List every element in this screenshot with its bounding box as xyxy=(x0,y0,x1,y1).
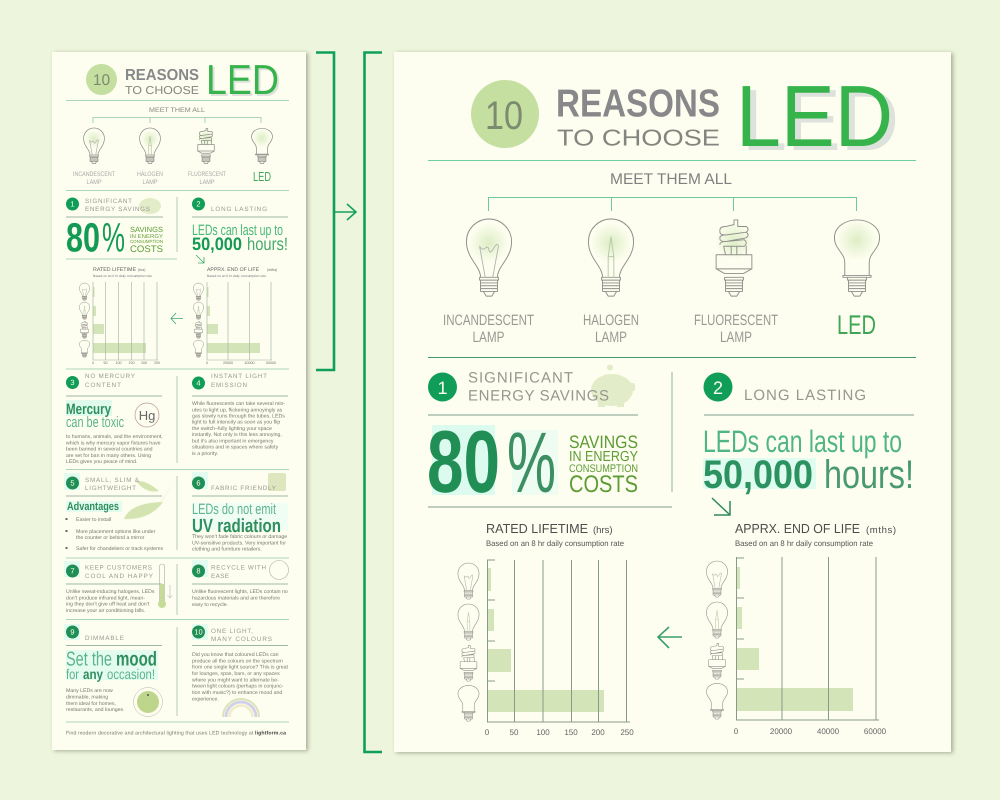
stat caption: COSTS xyxy=(569,471,638,498)
section 5 small: SMALL, SLIM & xyxy=(85,477,140,484)
arrow: left xyxy=(658,627,682,648)
axes and grid xyxy=(736,557,879,720)
chart small: rated lifetime: Based on an 8 hr daily consumption rate xyxy=(93,274,152,278)
arrow: down right xyxy=(712,498,730,515)
title: small poster: 10 xyxy=(93,72,110,89)
section 9 small: them ideal for homes, xyxy=(66,701,116,707)
section 3 small: NO MERCURY xyxy=(85,373,136,380)
section 7 small: increase your air conditioning bills. xyxy=(66,608,145,614)
claim: 50,000 xyxy=(703,453,813,497)
section 1 small xyxy=(66,198,163,260)
section 3 small xyxy=(66,373,163,465)
x axis labels: 200 xyxy=(591,728,605,737)
section 7 small: Unlike sweat-inducing halogens, LEDs xyxy=(66,589,155,595)
section 3 small: Mercury xyxy=(66,401,112,418)
section 3 small: which is why mercury vapor fixtures have xyxy=(66,440,161,446)
section 8 small: hazardous materials and are therefore xyxy=(192,596,280,602)
heading: LONG LASTING xyxy=(744,387,866,404)
x axis labels: 100 xyxy=(536,728,550,737)
section 9 small: 9 xyxy=(70,628,75,637)
lamp row xyxy=(84,128,272,164)
section 5 small: the counter or behind a mirror xyxy=(76,535,145,541)
section 6 small xyxy=(192,472,288,552)
title xyxy=(471,68,899,169)
chart: end of life: (mths) xyxy=(866,525,896,536)
section 4 small: instantly. Not only is this less annoying, xyxy=(192,432,282,438)
section 7 small: ing they don’t give off heat and don’t xyxy=(66,602,150,608)
section 1 small: IN ENERGY xyxy=(130,234,163,240)
number 2: 2 xyxy=(713,378,723,398)
bulbs xyxy=(458,563,479,721)
section 2 small: 2 xyxy=(196,200,201,209)
title: small poster: LED xyxy=(206,56,279,103)
badge: 10: 10 xyxy=(485,94,523,138)
section 3 small: Hg xyxy=(139,408,155,423)
section 4 small: gas slowly runs through the tubes, LEDs xyxy=(192,414,285,420)
chart small: end of life: APPRX. END OF LIFE xyxy=(207,267,260,273)
title: small poster xyxy=(86,56,281,105)
x axis labels: 250 xyxy=(620,728,634,737)
section 5 small: Safer for chandeliers or track systems xyxy=(76,546,163,552)
x axis labels: 40000 xyxy=(817,727,840,736)
section 1 small: 80 xyxy=(66,214,100,260)
section 8 small: easy to recycle. xyxy=(192,602,228,608)
x axis labels: 150 xyxy=(564,728,578,737)
heading: SIGNIFICANT xyxy=(468,370,573,387)
section 9 small: DIMMABLE xyxy=(85,635,124,642)
arrow small xyxy=(171,313,183,324)
section 7 small: 7 xyxy=(70,567,75,576)
icon: LED xyxy=(834,220,880,296)
section 1: energy savings xyxy=(427,364,638,511)
claim xyxy=(703,424,914,497)
chart small: end of life: 0 xyxy=(206,361,208,365)
chart small: rated lifetime: 0 xyxy=(92,361,94,365)
bracket: connects small poster to enlarged view xyxy=(316,52,382,752)
section 9 small: for xyxy=(66,666,79,682)
chart small: end of life xyxy=(193,267,277,365)
number 2 xyxy=(704,372,732,402)
section 10 small: tion with music?) to enhance mood and xyxy=(192,690,282,696)
section 5 small: More placement options like under xyxy=(76,529,156,535)
bulbs xyxy=(706,561,728,719)
lamp labels: LAMP xyxy=(472,329,504,346)
section 3 small: are set for ban in many others. Using xyxy=(66,453,151,459)
chart small: end of life: 40000 xyxy=(244,361,254,365)
section 4 small: the switch–fully lighting your space xyxy=(192,426,272,432)
section 7 small xyxy=(64,561,172,614)
x axis labels xyxy=(734,727,887,736)
section 4 small: utes to light up, flickering annoyingly as xyxy=(192,408,283,414)
section 8 small: Unlike fluorescent lights, LEDs contain no xyxy=(192,589,288,595)
panel: enlarged poster top xyxy=(394,52,951,752)
section 6 small: UV radiation xyxy=(192,516,281,537)
lamp labels: INCANDESCENT xyxy=(73,171,115,178)
lamp labels: LAMP xyxy=(595,329,627,346)
section 2 small: LEDs can last up to xyxy=(192,222,283,239)
section 9 small: dimmable, making xyxy=(66,694,108,700)
section 10 small: 10 xyxy=(194,628,203,637)
stat: 80%: 80 xyxy=(427,412,500,511)
stat caption: CONSUMPTION xyxy=(569,463,638,475)
chart: rated lifetime xyxy=(458,521,634,737)
heading: meet them all: MEET THEM ALL xyxy=(149,107,205,114)
section 2: long lasting xyxy=(703,372,914,515)
arrow: points to enlarged view xyxy=(335,204,356,220)
section 8 small: RECYCLE WITH xyxy=(211,564,266,572)
section 9 small: Set the xyxy=(66,648,112,670)
lamp labels: LED xyxy=(253,169,271,184)
x axis labels: 0 xyxy=(734,727,739,736)
section 9 small: any xyxy=(83,666,103,682)
section 7 small: don’t produce infrared light, mean- xyxy=(66,596,145,602)
chart: end of life: APPRX. END OF LIFE xyxy=(735,521,860,536)
section 4 small: INSTANT LIGHT xyxy=(211,373,267,380)
section 5 small: Advantages xyxy=(67,501,119,513)
footer: Find modern decorative and architectural lighting that uses LED technology at lightform.ca xyxy=(66,730,286,736)
stat caption: SAVINGS xyxy=(569,432,638,452)
section 10 small: from one single light source? This is great xyxy=(192,665,288,671)
section 9 small: occasion! xyxy=(107,666,155,682)
section 4 small xyxy=(192,373,288,457)
title: LED xyxy=(736,68,893,165)
chart: rated lifetime: (hrs) xyxy=(593,525,613,536)
section 3 small: CONTENT xyxy=(85,382,121,389)
section 6 small: They won’t fade fabric colours or damage xyxy=(192,534,287,540)
section 8 small: EASE xyxy=(211,573,229,580)
lamp labels: LAMP xyxy=(86,179,102,186)
heading: meet them all: MEET THEM ALL xyxy=(610,171,732,188)
lamp labels: LAMP xyxy=(200,179,214,186)
section 1 small: % xyxy=(102,214,125,260)
lamp labels: LED xyxy=(837,310,876,340)
chart small: rated lifetime: 200 xyxy=(141,361,147,365)
lamp labels: LAMP xyxy=(720,329,752,346)
section 6 small: 6 xyxy=(196,479,201,488)
stat caption: IN ENERGY xyxy=(569,449,638,465)
chart small: rated lifetime: (hrs) xyxy=(138,268,145,272)
chart small: rated lifetime: 150 xyxy=(128,361,134,365)
badge: 10 xyxy=(471,80,539,148)
stat: 80%: % xyxy=(507,415,556,511)
artefact highlight xyxy=(432,425,558,495)
stat caption xyxy=(569,432,638,498)
panel: full poster thumbnail xyxy=(52,52,306,750)
section 4 small: light to full intensity as soon as you flip xyxy=(192,420,280,426)
lamp row xyxy=(466,219,880,296)
title: small poster: LED xyxy=(208,58,281,105)
lamp labels xyxy=(443,310,876,346)
icon: fluorescent xyxy=(716,220,752,296)
section 7 small: COOL AND HAPPY xyxy=(85,573,154,580)
section 10 small: experience. xyxy=(192,696,219,702)
chart small: end of life: Based on an 8 hr daily consumption rate xyxy=(207,274,266,278)
lamp labels: INCANDESCENT xyxy=(443,312,534,329)
section 5 small: 5 xyxy=(70,479,75,488)
section 10 small: Did you know that coloured LEDs can xyxy=(192,652,279,658)
section 4 small: 4 xyxy=(196,379,201,388)
section 2 small: hours! xyxy=(247,234,288,254)
section 10 small xyxy=(192,624,288,717)
section 1 small: SIGNIFICANT xyxy=(85,198,132,205)
artefact highlight xyxy=(703,458,816,489)
section 3 small: 3 xyxy=(70,378,75,387)
lamp labels: LAMP xyxy=(142,179,158,186)
chart: end of life xyxy=(706,521,896,736)
title: TO CHOOSE xyxy=(557,125,720,151)
section 1 small: CONSUMPTION xyxy=(130,239,163,244)
lamp labels: FLUORESCENT xyxy=(188,171,226,178)
section 8 small: 8 xyxy=(196,567,201,576)
icon: halogen xyxy=(588,219,634,296)
chart small: rated lifetime: 50 xyxy=(104,361,108,365)
chart small: rated lifetime: 250 xyxy=(154,361,160,365)
section 9 small: Many LEDs are now xyxy=(66,688,113,694)
chart small: end of life: (mths) xyxy=(267,268,277,272)
x axis labels: 20000 xyxy=(770,727,793,736)
section 10 small: where you might want to alternate be- xyxy=(192,677,279,683)
number 1 xyxy=(428,372,457,402)
bars xyxy=(736,567,853,711)
section 9 small: restaurants, and lounges. xyxy=(66,707,125,713)
section 9 small: mood xyxy=(116,648,157,670)
bars xyxy=(487,568,604,712)
section 4 small: but it’s also important in emergency xyxy=(192,438,274,444)
title: REASONS xyxy=(556,83,720,126)
section 6 small: clothing and furniture retailers. xyxy=(192,546,262,552)
lamp labels: FLUORESCENT xyxy=(694,312,778,329)
lamp labels: HALOGEN xyxy=(137,171,163,178)
section 4 small: situations and in spaces where safety xyxy=(192,444,279,450)
x axis labels: 50 xyxy=(510,728,519,737)
section 1 small: COSTS xyxy=(130,244,163,255)
chart: rated lifetime: Based on an 8 hr daily consumption rate xyxy=(486,539,625,548)
chart small: rated lifetime: 100 xyxy=(116,361,122,365)
x axis labels: 0 xyxy=(485,728,490,737)
chart small: end of life: 60000 xyxy=(266,361,276,365)
chart: end of life: Based on an 8 hr daily consumption rate xyxy=(735,539,874,548)
section 3 small: LEDs gives you peace of mind. xyxy=(66,459,138,465)
section 4 small: is a priority. xyxy=(192,451,218,457)
icon: incandescent xyxy=(466,219,512,296)
section 6 small: LEDs do not emit xyxy=(192,501,277,518)
claim: hours! xyxy=(824,453,914,497)
section 4 small: EMISSION xyxy=(211,382,247,389)
heading xyxy=(468,370,609,405)
section 10 small: MANY COLOURS xyxy=(211,636,272,643)
heading: ENERGY SAVINGS xyxy=(468,388,609,405)
connector bracket xyxy=(488,198,856,211)
lamp labels: HALOGEN xyxy=(583,312,639,329)
section 1 small: SAVINGS xyxy=(130,225,163,234)
section 2 small: LONG LASTING xyxy=(211,206,267,213)
section 10 small: produce all the colours on the spectrum xyxy=(192,658,283,664)
section 6 small: UV-sensitive products. Very important for xyxy=(192,540,286,546)
section 5 small: Easier to install xyxy=(76,517,111,523)
section 2 small: 50,000 xyxy=(192,234,242,254)
section 5 small: LIGHTWEIGHT xyxy=(85,485,136,492)
section 10 small: ONE LIGHT, xyxy=(211,628,253,635)
chart: rated lifetime: RATED LIFETIME xyxy=(486,521,588,536)
section 5 small xyxy=(64,473,171,552)
section 6 small: FABRIC FRIENDLY xyxy=(211,485,277,492)
section 4 small: While fluorescents can take several min- xyxy=(192,401,285,407)
section 3 small: to humans, animals, and the environment, xyxy=(66,434,163,440)
section 8 small xyxy=(192,560,288,608)
section 1 small: ENERGY SAVINGS xyxy=(85,206,150,213)
chart small: rated lifetime xyxy=(79,267,160,365)
section 2 small xyxy=(192,198,288,263)
section 10 small: for lounges, spas, bars, or any spaces xyxy=(192,671,280,677)
x axis labels xyxy=(485,728,634,737)
axes and grid xyxy=(487,560,630,722)
icon: piggy bank xyxy=(591,364,635,407)
section 3 small: been banned in several countries and xyxy=(66,446,153,452)
number 1: 1 xyxy=(437,378,448,398)
section 3 small: can be toxic xyxy=(66,414,124,431)
section 10 small: tween light colours (perhaps in conjunc- xyxy=(192,684,284,690)
title: small poster: REASONS xyxy=(125,67,199,84)
title: LED xyxy=(742,72,899,169)
chart small: rated lifetime: RATED LIFETIME xyxy=(93,267,137,273)
section 1 small: 1 xyxy=(70,200,75,209)
x axis labels: 60000 xyxy=(864,727,887,736)
lamp labels xyxy=(73,169,271,186)
section 7 small: KEEP CUSTOMERS xyxy=(85,564,152,572)
chart small: end of life: 20000 xyxy=(223,361,233,365)
title: small poster: TO CHOOSE xyxy=(125,85,199,97)
claim: LEDs can last up to xyxy=(703,424,902,459)
section 9 small xyxy=(64,624,162,716)
